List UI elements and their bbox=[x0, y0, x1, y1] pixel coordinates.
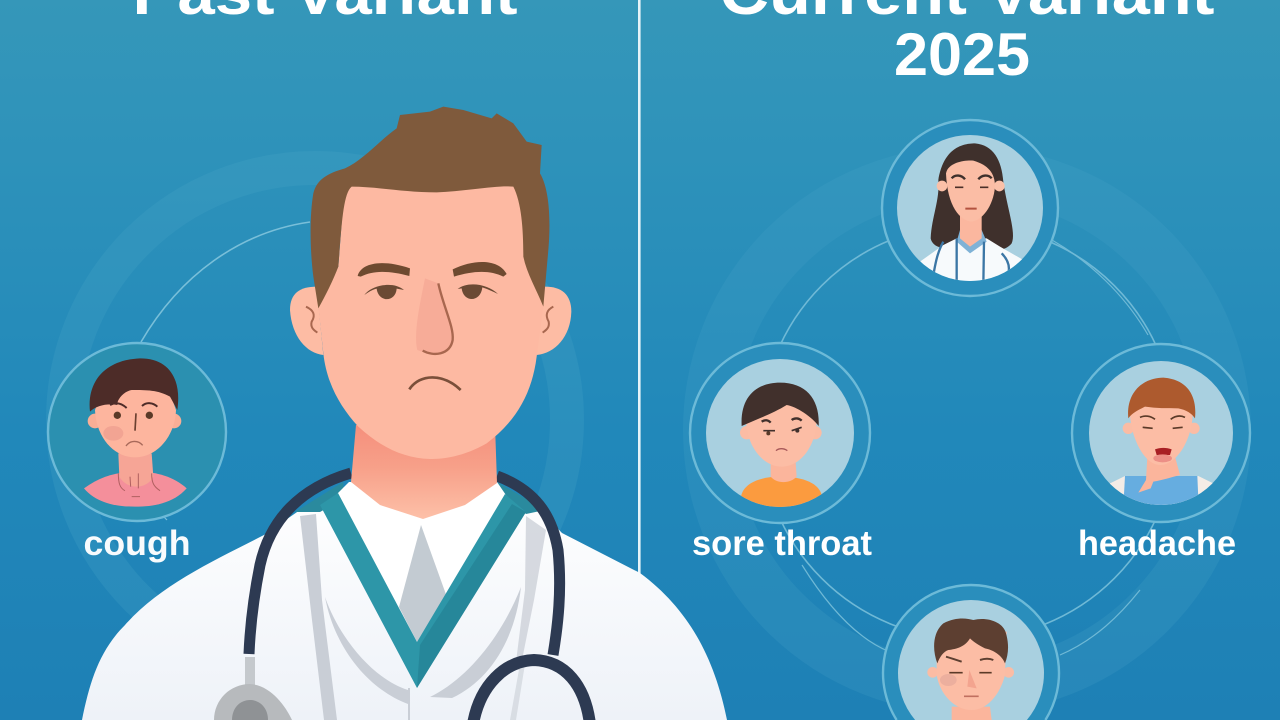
teal lapels bbox=[320, 493, 526, 688]
symptom: sore throat bbox=[690, 343, 870, 523]
avatar bbox=[740, 383, 822, 510]
divider bbox=[638, 0, 641, 580]
ears bbox=[290, 287, 323, 355]
hair bbox=[311, 107, 549, 308]
doctor illustration bbox=[82, 107, 727, 720]
heading: current variant 2025: 2025 bbox=[894, 21, 1030, 88]
label: cough: cough bbox=[84, 524, 190, 563]
disc bbox=[48, 343, 226, 521]
avatar bbox=[927, 619, 1014, 720]
disc bbox=[1072, 344, 1250, 522]
disc bbox=[883, 585, 1059, 720]
avatar bbox=[920, 143, 1023, 285]
mouth bbox=[409, 377, 461, 390]
avatar bbox=[1110, 378, 1213, 507]
symptom: doctor avatar bbox=[882, 120, 1058, 296]
symptom: cough bbox=[48, 343, 226, 521]
stethoscope chest piece bbox=[214, 684, 292, 720]
coat shading bbox=[300, 514, 546, 720]
disc bbox=[882, 120, 1058, 296]
shirt collar bbox=[337, 482, 506, 613]
nose bbox=[416, 278, 452, 353]
symptom: headache bbox=[1072, 344, 1250, 522]
symptom: bottom avatar bbox=[883, 585, 1059, 720]
face bbox=[318, 185, 543, 459]
label: sore throat: sore throat bbox=[692, 524, 872, 563]
label: headache: headache bbox=[1078, 524, 1236, 563]
heading: current variant 2025 bbox=[720, 0, 1214, 88]
neck bbox=[351, 425, 497, 519]
head bbox=[290, 107, 571, 459]
panel: current variant rings bbox=[709, 172, 1225, 688]
eyes bbox=[364, 285, 404, 299]
panel: past variant rings bbox=[63, 168, 567, 672]
tie bbox=[399, 525, 448, 642]
collar back teal bbox=[295, 482, 345, 512]
stethoscope bbox=[249, 473, 590, 720]
brows bbox=[358, 263, 410, 277]
coat bbox=[82, 484, 727, 720]
disc bbox=[690, 343, 870, 523]
avatar bbox=[84, 358, 187, 507]
